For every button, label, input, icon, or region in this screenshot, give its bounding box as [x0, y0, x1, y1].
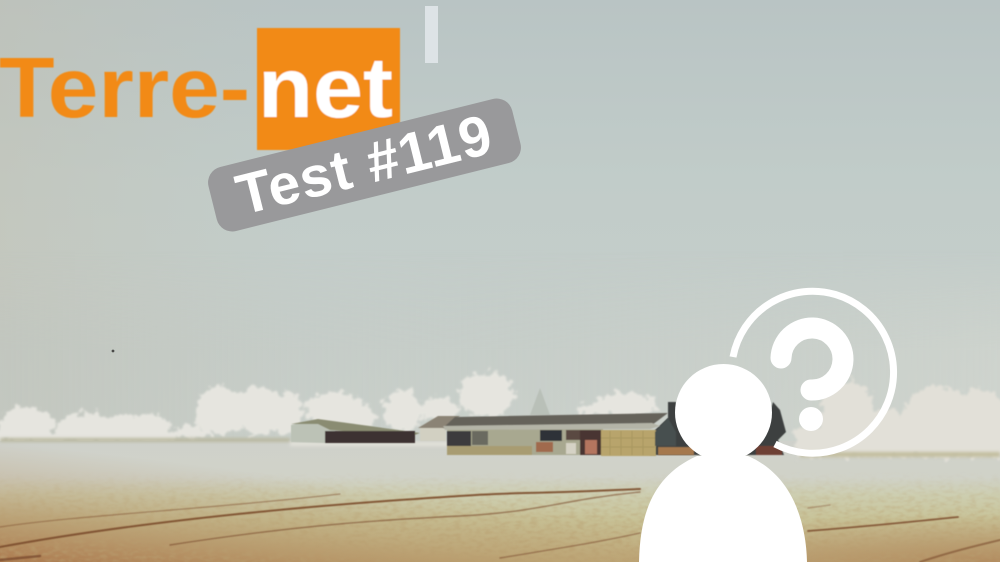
farm: small rear barn: [418, 416, 460, 441]
icon: person silhouette: [639, 364, 807, 562]
farm: dark gable barn behind person: [650, 402, 786, 455]
logo word: Terre-: Terre-: [0, 41, 250, 136]
pale vertical bar: [425, 6, 438, 63]
question mark dot: [799, 407, 823, 431]
background: conifer: [530, 388, 550, 415]
logo orange square: [257, 28, 400, 150]
farm: left shed: [291, 419, 420, 443]
background: frosted tree line: [0, 372, 657, 443]
ring: [733, 291, 894, 453]
person body: [639, 456, 807, 562]
question mark hook: [781, 328, 843, 390]
badge label: Test #119: [230, 102, 499, 228]
tractor tracks: [0, 489, 1000, 562]
background: frosted trees, right side: [795, 380, 1000, 458]
icon: question mark in ring: [733, 291, 894, 453]
farm: main open barn with hay bales: [443, 413, 694, 456]
badge: Test #119: [205, 95, 524, 235]
horizon hedge strip: [0, 438, 1000, 457]
logo: Terre-net: [0, 28, 400, 150]
person head: [675, 364, 772, 461]
logo word: net: net: [258, 41, 393, 136]
background: ploughed field: [0, 441, 1000, 562]
tiny bird: [112, 350, 114, 352]
